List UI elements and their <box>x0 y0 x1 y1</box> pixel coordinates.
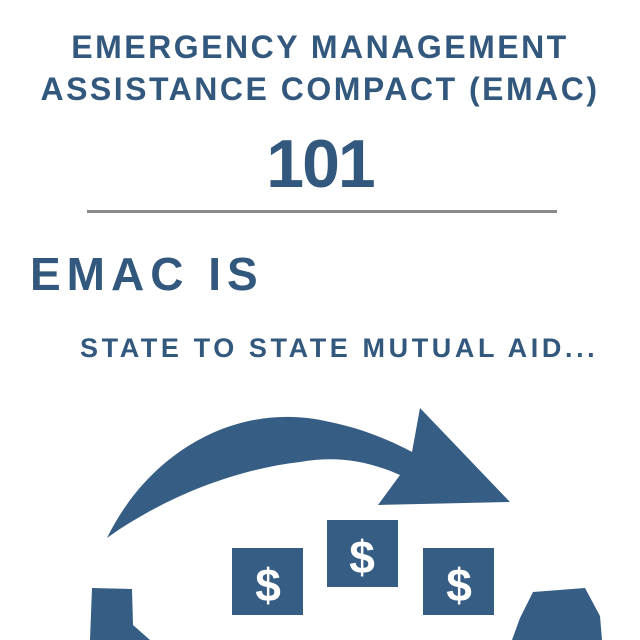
icon: dollar boxes <box>232 520 494 615</box>
diagram: mutual aid cycle: $ <box>349 531 375 583</box>
title: ASSISTANCE COMPACT (EMAC) <box>40 71 600 107</box>
arrow: curved <box>107 408 510 538</box>
diagram: mutual aid cycle: $ <box>446 559 472 611</box>
heading: EMAC IS: EMAC IS <box>30 248 264 300</box>
diagram: mutual aid cycle <box>90 408 602 640</box>
heading: 101: 101 <box>266 126 374 202</box>
subheading: STATE TO STATE MUTUAL AID... <box>80 333 598 363</box>
icon: state left <box>90 588 150 640</box>
diagram: mutual aid cycle: $ <box>255 559 281 611</box>
icon: state right <box>512 588 602 640</box>
title: EMERGENCY MANAGEMENT <box>71 29 569 65</box>
title <box>40 29 600 107</box>
